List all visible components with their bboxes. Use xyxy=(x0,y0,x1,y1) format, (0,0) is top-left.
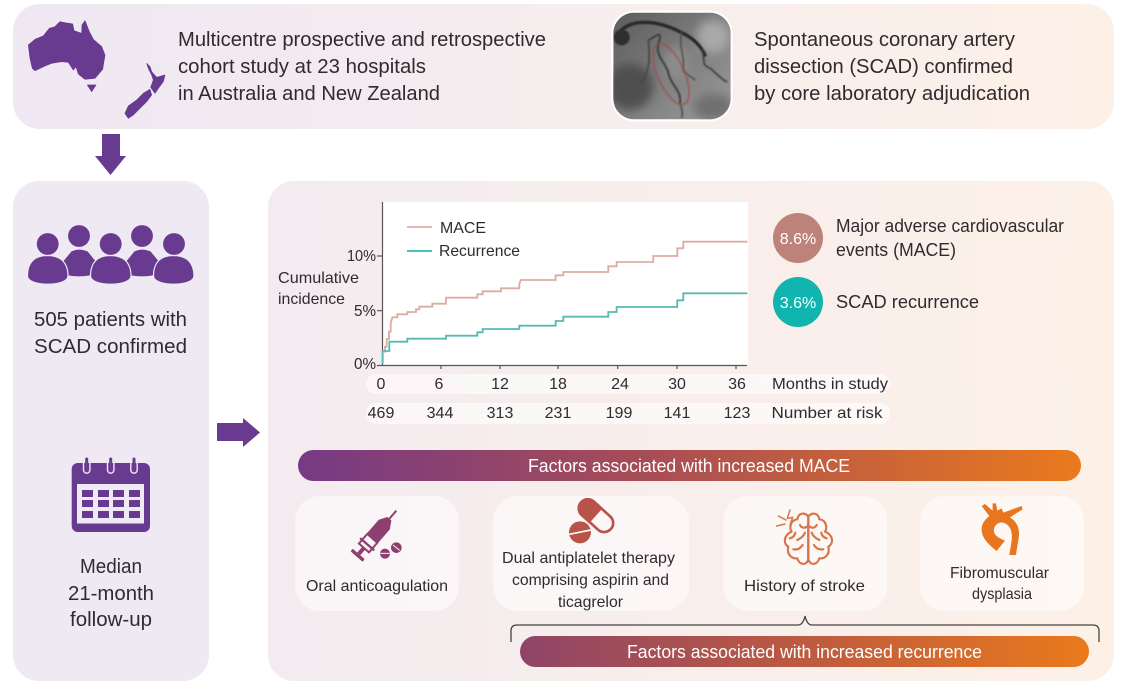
card: dual antiplatelet therapy: ticagrelor xyxy=(558,594,624,611)
x axis months: 12 xyxy=(491,376,509,393)
card: fibromuscular dysplasia xyxy=(920,496,1084,611)
number at risk: 199 xyxy=(606,405,632,422)
card: history of stroke: History of stroke xyxy=(744,578,865,595)
callout: MACE rate: Major adverse cardiovascular xyxy=(836,216,1064,236)
callout: recurrence rate: 3.6% xyxy=(780,295,816,312)
line: recurrence curve xyxy=(383,293,747,363)
line: MACE curve xyxy=(383,242,747,363)
number at risk: Number at risk xyxy=(772,405,884,422)
bracket: recurrence factors xyxy=(511,616,1099,642)
x axis months: Months in study xyxy=(772,376,888,393)
text: SCAD definition: by core laboratory adjudication xyxy=(754,83,1030,105)
arrow: down to patients xyxy=(95,134,126,175)
icon: brain xyxy=(777,510,832,564)
x axis months: 6 xyxy=(435,376,444,393)
text: SCAD definition: dissection (SCAD) confirmed xyxy=(754,56,1013,78)
card: dual antiplatelet therapy: Dual antiplatelet therapy xyxy=(502,550,675,567)
card: dual antiplatelet therapy xyxy=(493,494,689,611)
text: follow-up duration: Median xyxy=(80,556,142,578)
number at risk xyxy=(368,405,884,422)
icon: map of Australia and New Zealand xyxy=(28,21,165,118)
card: fibromuscular dysplasia: Fibromuscular xyxy=(950,565,1050,582)
text: patient count: 505 patients with xyxy=(34,309,187,331)
y axis labels: 10% xyxy=(347,248,376,265)
chart: cumulative incidence xyxy=(278,202,890,424)
card: fibromuscular dysplasia: dysplasia xyxy=(972,586,1032,603)
y axis labels: 0% xyxy=(354,356,376,373)
x axis months: 36 xyxy=(728,376,746,393)
heading bar: factors for MACE xyxy=(298,450,1081,481)
card: history of stroke xyxy=(723,496,887,611)
y axis labels: incidence xyxy=(278,291,345,308)
legend: Recurrence xyxy=(439,243,520,260)
text: follow-up duration: 21-month xyxy=(68,583,154,605)
number at risk: 469 xyxy=(368,405,394,422)
number at risk: 123 xyxy=(724,405,750,422)
text: patient count: SCAD confirmed xyxy=(34,336,187,358)
panel: outcomes xyxy=(268,181,1114,681)
panel: study design xyxy=(13,4,1114,129)
arrow: right to outcomes xyxy=(217,418,260,447)
icon: aorta xyxy=(982,503,1023,555)
icon: capsule and tablet xyxy=(569,494,618,543)
legend xyxy=(407,220,520,260)
callout: MACE rate xyxy=(773,213,1069,263)
callout: recurrence rate: SCAD recurrence xyxy=(836,292,979,312)
text: study description: Multicentre prospective and retrospective xyxy=(178,29,546,51)
callout: recurrence rate xyxy=(773,277,979,327)
callout: MACE rate: 8.6% xyxy=(780,231,816,248)
icon: calendar xyxy=(72,459,150,532)
icon: syringe and pills xyxy=(349,505,403,563)
number at risk: 313 xyxy=(487,405,513,422)
panel: patients and follow-up xyxy=(13,181,209,681)
y axis labels xyxy=(278,248,376,373)
x axis months: 24 xyxy=(611,376,629,393)
text: study description: cohort study at 23 hospitals xyxy=(178,56,426,78)
x axis months: 30 xyxy=(668,376,686,393)
legend: MACE xyxy=(440,220,486,237)
icon: coronary angiogram image xyxy=(607,11,733,121)
callout: MACE rate: events (MACE) xyxy=(836,240,956,260)
text: SCAD definition: Spontaneous coronary artery xyxy=(754,29,1015,51)
text: follow-up duration: follow-up xyxy=(70,609,152,631)
number at risk: 141 xyxy=(664,405,690,422)
x axis months: 18 xyxy=(549,376,567,393)
card: oral anticoagulation xyxy=(295,496,459,611)
card: oral anticoagulation: Oral anticoagulation xyxy=(306,578,448,595)
x axis months xyxy=(377,376,888,393)
heading bar: factors for MACE: Factors associated with increased MACE xyxy=(528,456,850,476)
text: study description: in Australia and New Zealand xyxy=(178,83,440,105)
y axis labels: Cumulative xyxy=(278,270,359,287)
icon: group of people xyxy=(28,224,194,284)
number at risk: 344 xyxy=(427,405,453,422)
heading bar: factors for recurrence: Factors associated with increased recurrence xyxy=(627,642,982,662)
x axis months: 0 xyxy=(377,376,386,393)
y axis labels: 5% xyxy=(354,303,376,320)
heading bar: factors for recurrence xyxy=(520,636,1089,667)
card: dual antiplatelet therapy: comprising aspirin and xyxy=(512,572,669,589)
number at risk: 231 xyxy=(545,405,571,422)
